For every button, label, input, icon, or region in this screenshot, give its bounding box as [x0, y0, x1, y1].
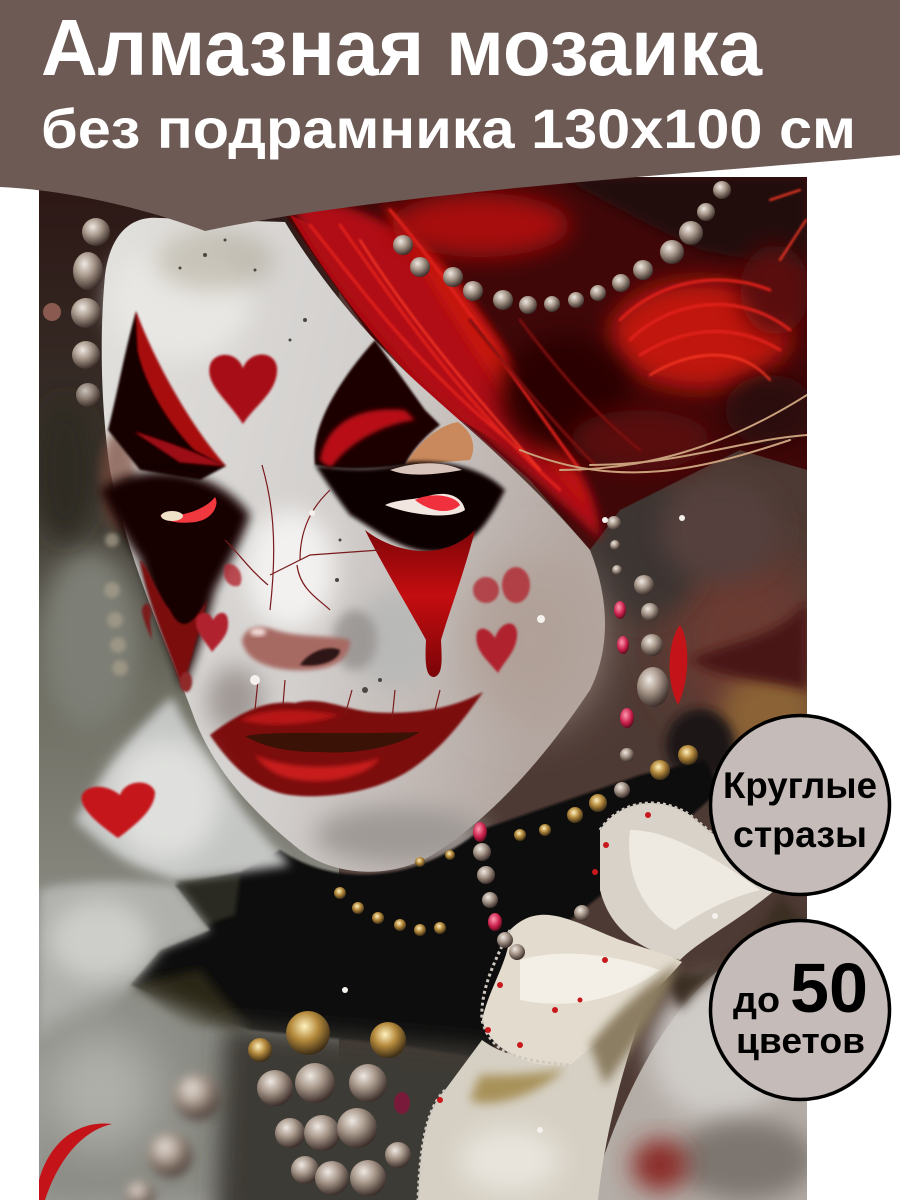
white collar, left [39, 697, 290, 1200]
lips [210, 692, 483, 796]
red heart on card [82, 783, 155, 838]
badge: up to 50 colours: до [733, 979, 780, 1020]
right eye makeup and brow [314, 340, 505, 552]
artwork background [35, 177, 825, 1200]
title: Алмазная мозаика [41, 3, 762, 92]
dark pearl backdrop [215, 1025, 500, 1200]
large pearls, bottom [126, 1011, 411, 1200]
hair strands [310, 190, 807, 490]
badge: round rhinestones: Круглые [723, 765, 877, 806]
white ruffled collar, right [418, 803, 775, 1200]
ruffle trim [416, 802, 714, 1200]
sparkles [250, 510, 718, 1133]
badge: up to 50 colours [710, 920, 890, 1100]
portrait artwork: clown woman [35, 177, 825, 1200]
nose [242, 627, 350, 670]
red teardrop [365, 530, 475, 677]
badge: round rhinestones [710, 716, 890, 894]
left eye [100, 471, 250, 690]
eye makeup: left diamond [108, 311, 226, 480]
face [100, 218, 605, 872]
necklace beads [334, 745, 698, 960]
header banner [0, 0, 900, 231]
subtitle: без подрамника 130х100 см [41, 97, 856, 160]
forehead heart [209, 354, 277, 424]
cheek hearts [142, 564, 530, 692]
pearls in hair [393, 181, 731, 314]
crack lines [225, 465, 440, 720]
badge: up to 50 colours: цветов [736, 1020, 865, 1061]
face speckles [178, 238, 382, 693]
badge: round rhinestones: стразы [733, 814, 867, 855]
hand, bottom right [590, 895, 815, 1200]
hair [285, 177, 815, 690]
dark neck and collar [130, 760, 720, 1060]
earring bead chains [473, 516, 687, 931]
dark lock, lower right [690, 600, 807, 690]
badge: up to 50 colours: 50 [790, 949, 868, 1027]
pearls, left side [43, 218, 128, 676]
